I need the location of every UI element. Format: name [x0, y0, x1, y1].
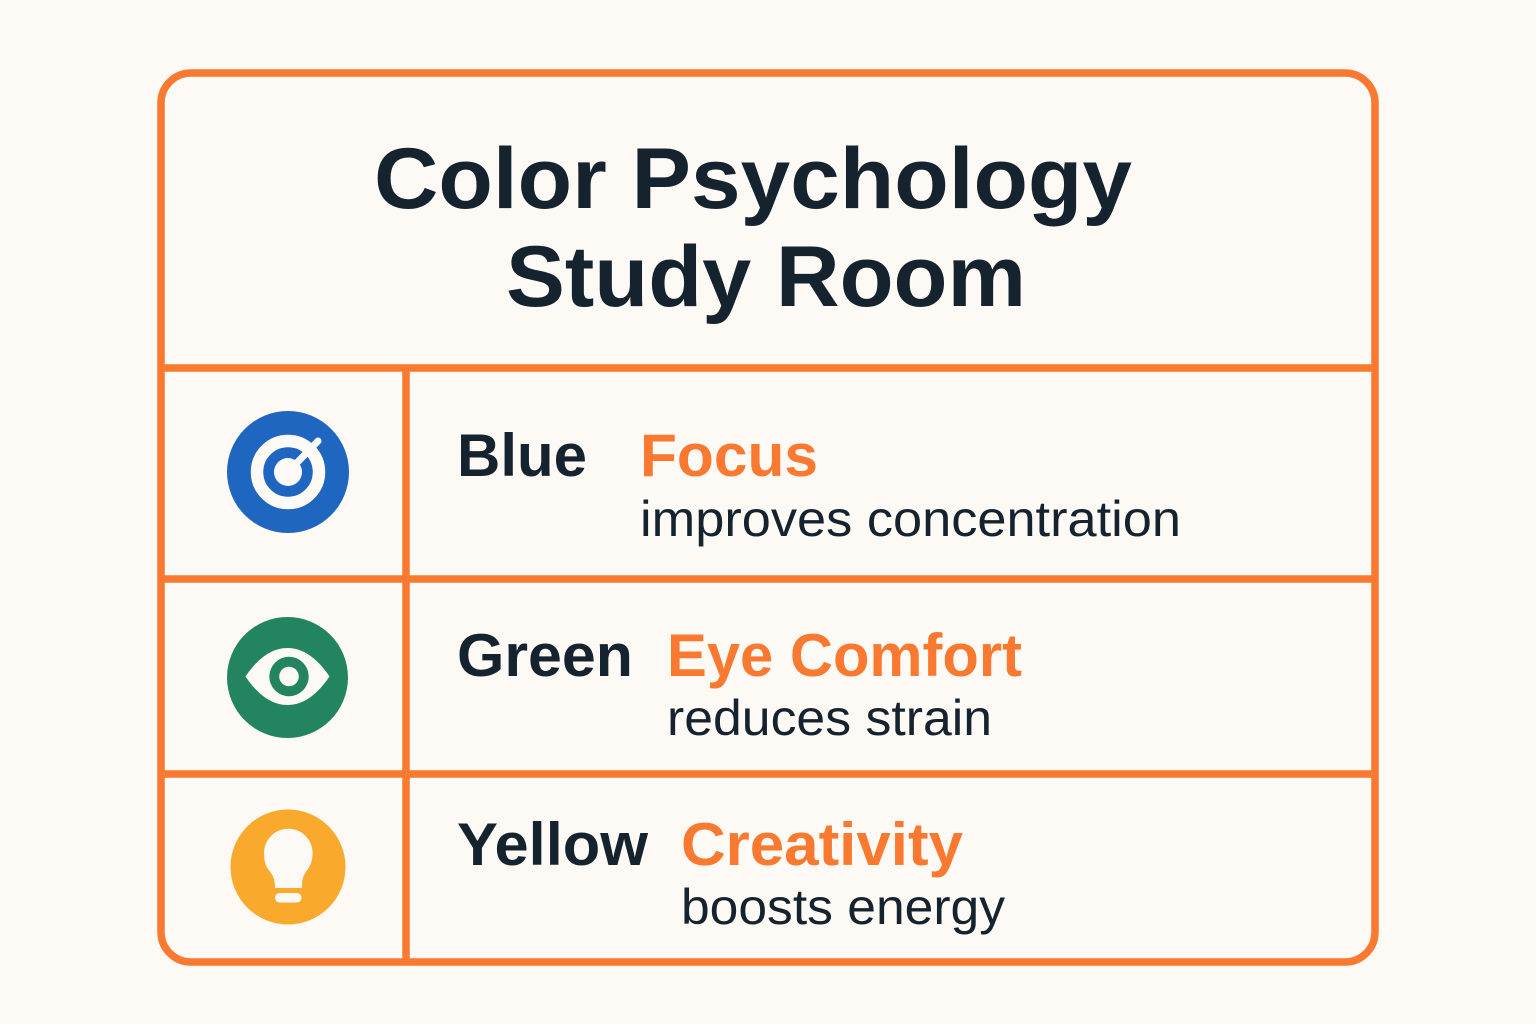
label: blue focus: [457, 422, 1181, 547]
label: yellow creativity: boosts energy: [681, 879, 1005, 935]
label: yellow creativity: [457, 811, 1005, 935]
row: yellow creativity: [230, 810, 1005, 935]
title: Study Room: [506, 229, 1026, 325]
label: yellow creativity: Yellow: [457, 811, 648, 878]
label: blue focus: Focus: [640, 422, 818, 489]
label: green eye comfort: [457, 622, 1022, 746]
title: [374, 131, 1132, 325]
label: green eye comfort: reduces strain: [667, 690, 992, 746]
icon: light bulb: [230, 810, 346, 924]
row: green eye comfort: [227, 617, 1022, 746]
title: Color Psychology: [374, 131, 1132, 227]
label: green eye comfort: Green: [457, 622, 633, 689]
label: blue focus: improves concentration: [640, 491, 1181, 547]
label: blue focus: Blue: [457, 422, 587, 489]
table frame: [161, 73, 1375, 962]
row: blue focus: [227, 411, 1181, 547]
icon: eye: [227, 617, 348, 738]
label: green eye comfort: Eye Comfort: [667, 622, 1022, 689]
label: yellow creativity: Creativity: [681, 811, 964, 878]
icon: target: [227, 411, 349, 533]
